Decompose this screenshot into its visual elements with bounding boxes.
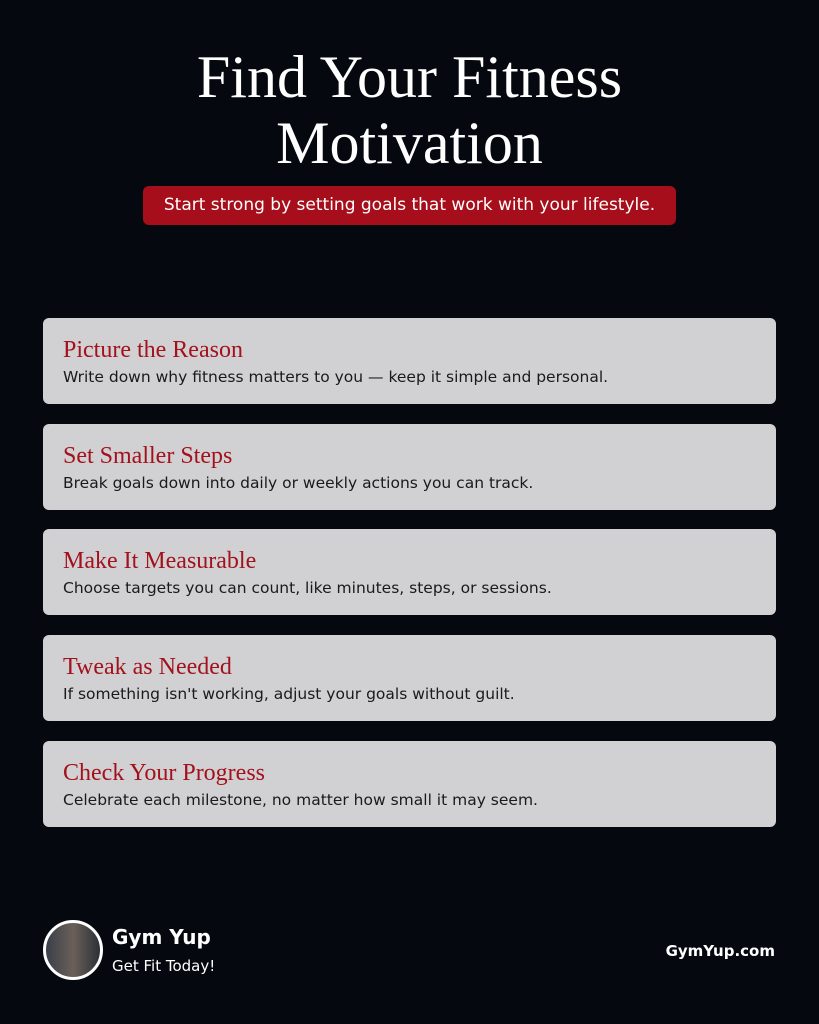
card: set smaller steps: Set Smaller Steps (63, 443, 232, 469)
card: make it measurable: Make It Measurable (63, 548, 256, 574)
brand name: Gym Yup (112, 925, 211, 949)
card: tweak as needed: If something isn't working, adjust your goals without guilt. (63, 685, 515, 703)
subtitle pill: Start strong by setting goals that work with your lifestyle. (164, 195, 655, 215)
card: picture the reason: Write down why fitness matters to you — keep it simple and personal. (63, 368, 608, 386)
card: tweak as needed (43, 635, 776, 721)
card: check your progress: Celebrate each milestone, no matter how small it may seem. (63, 791, 538, 809)
card: picture the reason: Picture the Reason (63, 337, 243, 363)
title: Find Your Fitness (197, 44, 622, 110)
card: tweak as needed: Tweak as Needed (63, 654, 232, 680)
card: check your progress (43, 741, 776, 827)
title: Motivation (276, 110, 543, 176)
card: make it measurable (43, 529, 776, 615)
subtitle pill (143, 186, 676, 225)
tagline: Get Fit Today! (112, 957, 215, 975)
website: GymYup.com (666, 942, 775, 960)
icon: avatar (43, 920, 103, 980)
title (197, 44, 622, 176)
card: set smaller steps (43, 424, 776, 510)
card: check your progress: Check Your Progress (63, 760, 265, 786)
card: make it measurable: Choose targets you can count, like minutes, steps, or sessions. (63, 579, 552, 597)
card: set smaller steps: Break goals down into daily or weekly actions you can track. (63, 474, 533, 492)
card: picture the reason (43, 318, 776, 404)
